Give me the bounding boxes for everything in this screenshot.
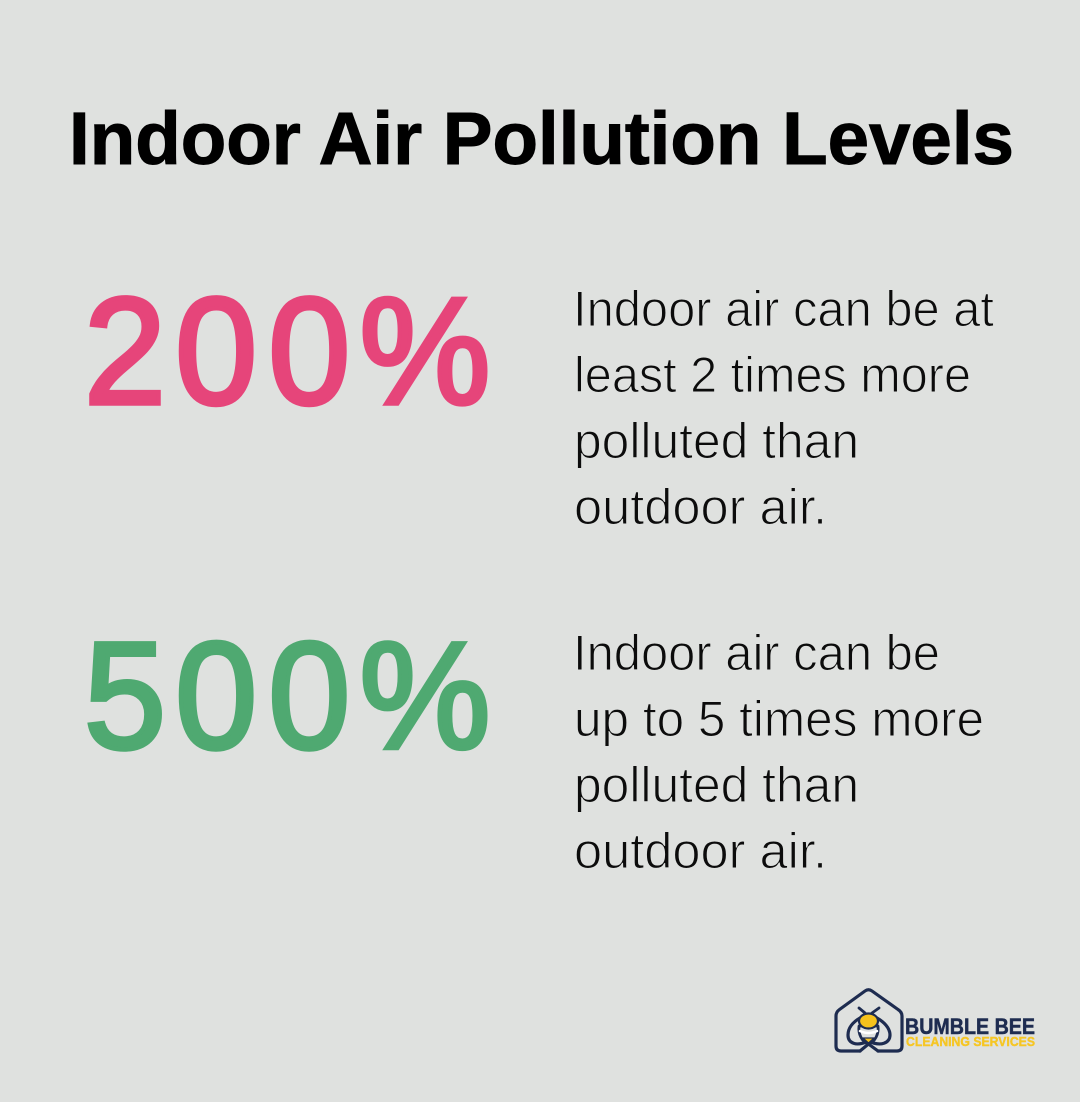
description: 200% (573, 281, 994, 535)
stat: 200%: 200% (84, 265, 491, 436)
description: 500%: outdoor air. (574, 823, 827, 879)
description: 200%: polluted than (574, 413, 859, 469)
stat: 500%: 500% (84, 610, 491, 780)
description: 500%: Indoor air can be (573, 625, 940, 681)
logo: Bumble Bee Cleaning Services (836, 990, 1035, 1051)
description: 200%: Indoor air can be at (573, 281, 994, 337)
description: 500%: polluted than (574, 757, 859, 813)
icon: house with bee (836, 990, 902, 1051)
description: 500% (573, 625, 984, 879)
title: Indoor Air Pollution Levels (69, 97, 1014, 180)
logo tagline: CLEANING SERVICES (906, 1034, 1035, 1049)
description: 200%: outdoor air. (574, 479, 827, 535)
logo name: BUMBLE BEE (905, 1014, 1035, 1039)
description: 200%: least 2 times more (574, 347, 971, 403)
description: 500%: up to 5 times more (574, 691, 984, 747)
